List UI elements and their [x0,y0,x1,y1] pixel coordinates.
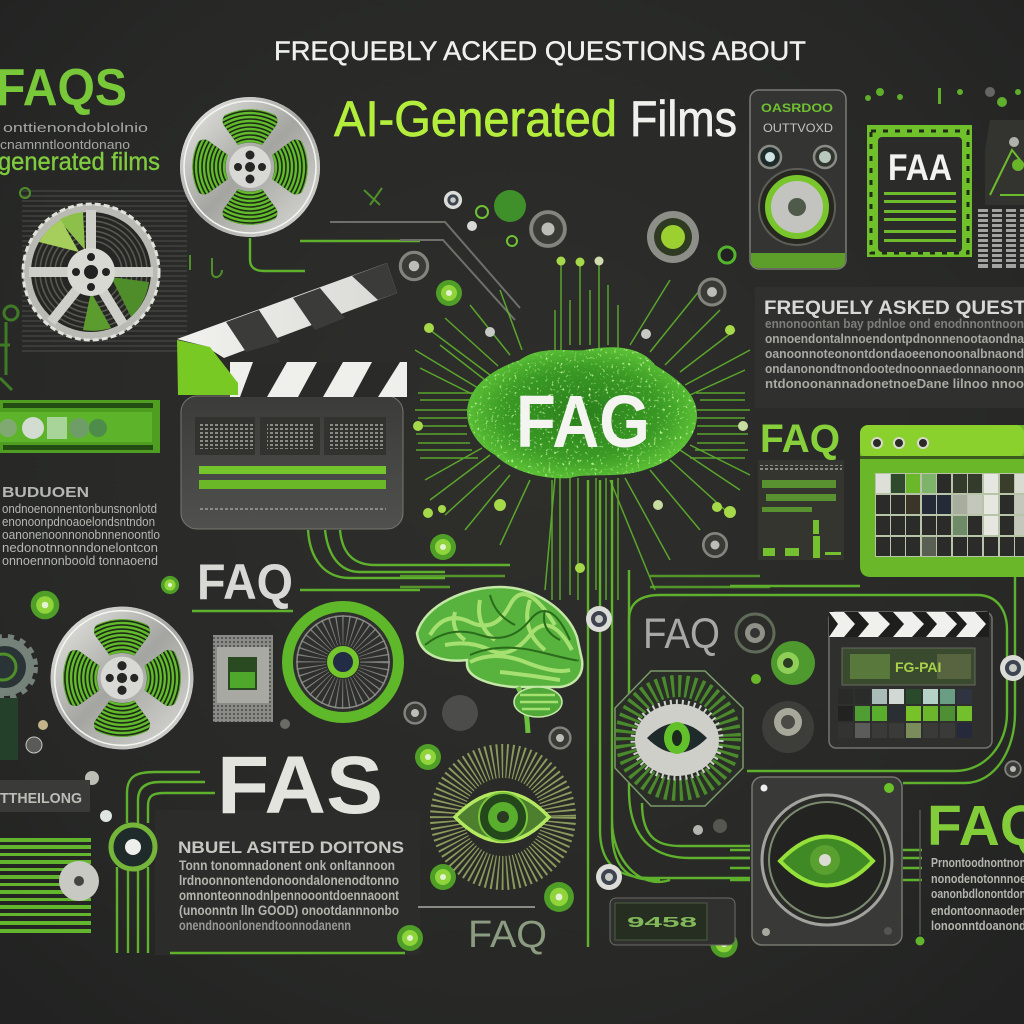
panel: left green strip [0,400,160,453]
text block: garbled lines [0,120,148,152]
panel: FAA document: FAA [888,147,952,188]
burst bright dots [413,256,748,573]
icon: brain [417,587,582,733]
subtitle: Films [630,91,737,147]
text block: novel assisted: Tonn tonomnadonent onk onltannoon [179,858,395,873]
title: FREQUEBLY ACKED QUESTIONS ABOUT [274,36,806,66]
label: small bottom box [610,898,735,945]
panel: eye device [752,777,902,945]
icon: sun eye [447,761,559,873]
grey trace lines [330,222,535,907]
chart: green noise block [758,460,844,560]
icon: green drop [916,936,924,946]
text block: left mid: BUDUOEN [2,484,89,501]
heading: FAQ center left: FAQ [197,554,293,610]
label: bottom-left box [0,780,90,812]
text block: garbled lines: onttienondoblolnio [3,120,148,135]
text block: novel assisted: onendnoonlonendtoonnodanenn [179,918,351,933]
icon: chip [213,635,273,722]
central FAQ cloud [467,347,697,478]
icon: lower film reel [51,607,193,749]
text block: novel assisted: (unoonntn lln GOOD) onootdannnonbo [179,903,399,918]
top right specks [865,87,1021,107]
text block: bottom right [931,855,1024,933]
text block: left mid: nedonotnnonndonelontcon [2,540,158,555]
small glyphs near reels [20,188,382,277]
text block: frequently asked: FREQUELY ASKED QUEST [764,298,1024,319]
label: small bottom box: 9458 [627,914,697,931]
text block: garbled lines: cnamnntloontdonano [0,137,130,152]
panel: speaker: OASRDOO [761,101,833,115]
label: bottom-left box: TTHEILONG [0,790,82,807]
panel: top left FAQs [0,59,160,176]
icon: left edge bracket [0,306,18,390]
scattered nodes [26,190,1024,958]
heading: FAQ bottom center: FAQ [468,914,547,956]
text block: left mid [2,484,160,568]
text block: novel assisted [178,838,404,933]
circuit lines [117,238,1015,953]
central FAQ cloud: FAG [516,380,650,463]
text block: novel assisted: lrdnoonnontendonoondalonenodtonno [179,873,399,888]
text block: left mid: ondnoenonnentonbunsnonlotd [2,501,157,516]
panel backing: frequently asked block [755,287,1024,408]
icon: bottom-left knobs [59,825,155,901]
panel backing: novel assisted block [155,810,420,955]
icon: stripes [0,838,91,933]
heading: FAQS: FAQS [0,59,127,117]
text block: frequently asked: ntdonoonannadonetnoeDane lilnoo nnoo [765,376,1024,391]
text block: left mid: enonoonpdnoaoelondsntndon [2,514,155,529]
panel: speaker [750,90,846,269]
green corner [177,340,238,395]
icon: gear at left edge [0,637,35,760]
heading: FAQ right: FAQ [760,417,840,461]
icon: eye octagon [615,671,743,806]
text block: frequently asked [764,298,1024,391]
text block: novel assisted: omnonteonnodnlpennooontdoennaoont [179,888,399,903]
icon: left film reel [23,204,159,340]
panel: speaker: OUTTVOXD [763,121,833,135]
text block: left mid: onnoennonboold tonnaoend [2,553,158,568]
green text: generated films: generated films [0,148,160,176]
panel: FAA document [867,125,972,257]
text block: FAQ mid: FAQ [643,610,720,658]
panel: clapper screen: FG-PAI [895,659,941,675]
clapper bar [230,362,407,397]
subtitle: AI-Generated [334,91,617,147]
panel: clapper screen [829,612,992,748]
panel: green calendar [860,425,1024,577]
icon: green lens [282,601,404,723]
clapper arm [177,263,397,358]
icon: corner device [978,120,1024,268]
board body [181,396,403,529]
icons: small knobs [736,614,815,753]
central burst rays [415,265,750,600]
icon: clapperboard [177,263,407,529]
text block: left mid: oanonenoonnonobnnenoontlo [2,527,160,542]
heading: FAS: FAS [217,740,383,831]
text block: novel assisted: NBUEL ASITED DOITONS [178,838,404,857]
icon: top film reel [180,97,320,237]
hatch texture behind left reel [22,190,187,355]
